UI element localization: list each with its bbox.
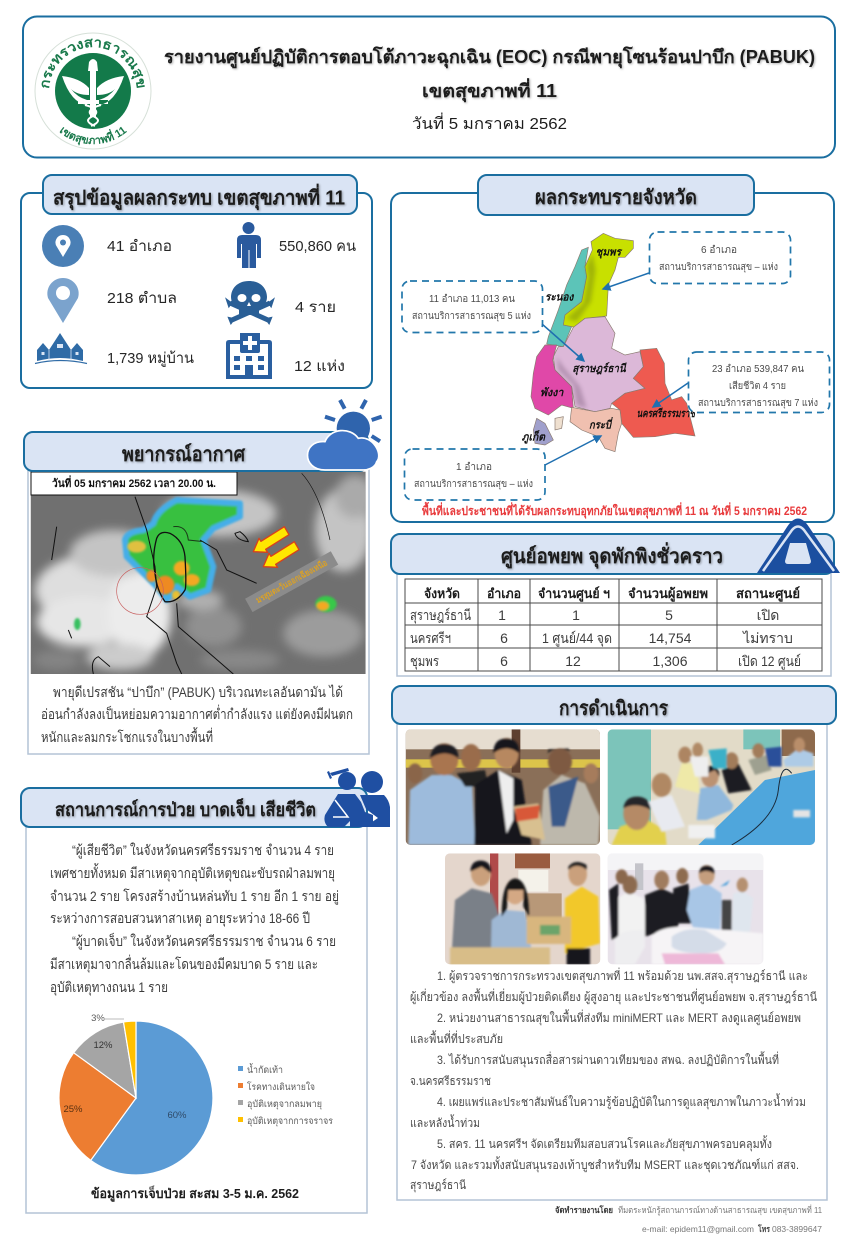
pie chart: 3% [91,1013,105,1024]
operations text: และพื้นที่ที่ประสบภัย [410,1030,503,1046]
shelter table: 1,306 [652,653,688,669]
shelter table: อำเภอ [487,586,521,601]
heading: by province: ผลกระทบรายจังหวัด [535,187,697,209]
shelter table: ไม่ทราบ [742,630,793,646]
map of provinces: นครศรีธรรมราช [637,407,696,420]
operations text [410,967,817,1193]
heading: shelters [391,534,834,574]
chart caption: ข้อมูลการเจ็บป่วย สะสม 3-5 ม.ค. 2562 [91,1184,299,1202]
operations text: สุราษฎร์ธานี [410,1178,466,1193]
satellite image [31,472,375,674]
map of provinces: ชุมพร [596,246,623,259]
panel: impact by province [391,175,834,522]
callout: Nakhon Si Thammarat: เสียชีวิต 4 ราย [729,380,786,392]
map caption: พื้นที่และประชาชนที่ได้รับผลกระทบอุทกภัยในเขตสุขภาพที่ 11 ณ วันที่ 5 มกราคม 2562 [422,501,807,519]
callout: Nakhon Si Thammarat: สถานบริการสาธารณสุข 7 แห่ง [698,398,818,409]
heading: situation [21,788,367,827]
footer credits: จัดทำรายงานโดย [555,1205,613,1215]
shelter table: 5 [665,607,673,623]
stat: villages: 1,739 หมู่บ้าน [107,350,194,367]
text: deaths and injuries: จำนวน 2 ราย โครงสร้างบ้านหล่นทับ 1 ราย อีก 1 ราย อยู่ [50,888,339,905]
heading: situation: สถานการณ์การป่วย บาดเจ็บ เสียชีวิต [55,797,316,821]
text: deaths and injuries: เพศชายทั้งหมด มีสาเหตุจากอุบัติเหตุขณะขับรถฝ่าลมพายุ [50,863,335,882]
icon: injured person with helper [324,768,390,827]
shelter table: ชุมพร [410,653,439,670]
shelter table: 6 [500,653,508,669]
heading: shelters: ศูนย์อพยพ จุดพักพิงชั่วคราว [501,541,723,570]
panel: regional impact summary [21,175,372,388]
operations text: ผู้เกี่ยวข้อง ลงพื้นที่เยี่ยมผู้ป่วยติดเตียง ผู้สูงอายุ และประชาชนที่ศูนย์อพยพ จ.สุราษฎร์ธานี [410,988,817,1005]
icon: houses [35,333,87,364]
shelter table: 1 [572,607,580,623]
shelter table: จำนวนผู้อพยพ [628,586,708,602]
shelter table: 6 [500,630,508,646]
footer credits [555,1204,822,1234]
shelter table: 14,754 [649,630,692,646]
heading: forecast: พยากรณ์อากาศ [122,443,246,466]
callout: Ranong: 11 อำเภอ 11,013 คน [429,294,515,305]
map of provinces: กระบี่ [589,416,614,431]
label: northeast monsoon: มรสุมตะวันออกเฉียงเหนือ [254,557,329,606]
text: deaths and injuries: มีสาเหตุมาจากลื่นล้มและโดนของมีคมบาด 5 ราย และ [50,955,318,973]
shelter table: 1 [498,607,506,623]
chart legend: อุบัติเหตุจากลมพายุ [247,1099,322,1110]
header panel [22,16,836,158]
operations text: 1. ผู้ตรวจราชการกระทรวงเขตสุขภาพที่ 11 พร้อมด้วย นพ.สสจ.สุราษฎร์ธานี และ [437,967,808,984]
operations text: 3. ได้รับการสนับสนุนรถสื่อสารผ่านดาวเทียมของ สพฉ. ลงปฏิบัติการในพื้นที่ [437,1051,779,1068]
logo: health region 11 seal: เขตสุขภาพที่ 11 [60,126,127,146]
arrow: to Chumphon [603,273,649,289]
callout: Chumphon: 6 อำเภอ [701,245,737,256]
stat: districts: 41 อำเภอ [107,238,172,255]
date box: วันที่ 05 มกราคม 2562 เวลา 20.00 น. [52,475,216,490]
footer credits: ทีมตระหนักรู้สถานการณ์ทางด้านสาธารณสุข เขตสุขภาพที่ 11 [618,1204,822,1216]
icon: location pin [47,278,79,323]
heading: operations [392,686,836,724]
heading: forecast [24,432,368,471]
pie chart [59,1013,213,1175]
map of provinces [522,233,696,452]
icon: person [237,222,261,268]
logo: health region 11 seal [34,32,152,150]
chart legend: อุบัติเหตุจากการจราจร [247,1116,333,1127]
icon: sun behind cloud [307,400,382,470]
photo: relief handover [406,729,600,845]
shelter table: นครศรีฯ [410,630,451,646]
shelter table: สุราษฎร์ธานี [410,607,471,624]
stat: people affected: 550,860 คน [279,238,356,255]
icon: hospital [226,333,272,379]
forecast text: พายุดีเปรสชัน “ปาบึก” (PABUK) บริเวณทะเลอันดามัน ได้ [53,684,343,701]
radar echoes [125,500,240,600]
footer credits: e-mail: epidem11@gmail.com [642,1224,754,1234]
shelter table [405,579,822,671]
panel: illness, injury and deaths [21,768,390,1213]
chart legend: น้ำกัดเท้า [247,1063,283,1076]
forecast text: หนักและลมกระโชกแรงในบางพื้นที่ [41,727,213,745]
heading: summary: สรุปข้อมูลผลกระทบ เขตสุขภาพที่ 11 [53,182,345,212]
map of provinces: สุราษฎร์ธานี [572,362,627,376]
panel: weather forecast [24,400,382,754]
arrow: to Nakhon Si Thammarat [653,383,688,407]
title: เขตสุขภาพที่ 11 [422,78,557,103]
photos [406,729,815,966]
map of provinces: ภูเก็ต [522,430,546,445]
callout: Chumphon: สถานบริการสาธารณสุข – แห่ง [659,262,778,273]
panel: shelters [391,518,840,676]
text: deaths and injuries: อุบัติเหตุทางถนน 1 ราย [50,979,168,996]
callout: Ranong [402,281,542,332]
shelter table: 1 ศูนย์/44 จุด [542,630,612,647]
shelter table: สถานะศูนย์ [736,586,800,602]
footer credits: 083-3899647 [772,1224,822,1234]
pie chart: 60% [167,1110,187,1121]
operations text: 2. หน่วยงานสาธารณสุขในพื้นที่ส่งทีม miniMERT และ MERT ลงดูแลศูนย์อพยพ [437,1009,801,1026]
chart legend [238,1063,333,1127]
shelter table: เปิด [757,607,779,623]
operations text: และหลังน้ำท่วม [410,1114,480,1130]
shelter table: 12 [565,653,581,669]
callout: Ranong: สถานบริการสาธารณสุข 5 แห่ง [412,311,531,322]
operations text: 5. สคร. 11 นครศรีฯ จัดเตรียมทีมสอบสวนโรคและภัยสุขภาพครอบคลุมทั้ง [437,1135,772,1152]
title: วันที่ 5 มกราคม 2562 [412,112,567,133]
text: deaths and injuries [50,842,339,996]
heading: by province [478,175,754,215]
callout: Krabi: สถานบริการสาธารณสุข – แห่ง [414,479,533,490]
stat: sub-districts: 218 ตำบล [107,290,177,307]
date box [31,472,237,495]
operations text: จ.นครศรีธรรมราช [410,1074,491,1088]
stat: deaths: 4 ราย [295,299,336,316]
chart legend: โรคทางเดินหายใจ [247,1081,315,1093]
title: รายงานศูนย์ปฏิบัติการตอบโต้ภาวะฉุกเฉิน (EOC) กรณีพายุโซนร้อนปาบึก (PABUK) [164,46,815,69]
photo: supply delivery [445,853,600,966]
pie chart: 12% [93,1040,113,1051]
arrows: monsoon wind direction [253,527,299,567]
photo: meeting room [608,729,815,845]
icon: tent [757,518,840,573]
callout: Nakhon Si Thammarat [688,352,830,412]
arrow: to Krabi [545,436,601,465]
text: deaths and injuries: ระหว่างการสอบสวนหาสาเหตุ อายุระหว่าง 18-66 ปี [50,910,310,927]
heading: operations: การดำเนินการ [559,698,668,720]
footer credits: โทร [757,1224,770,1234]
callout: Nakhon Si Thammarat: 23 อำเภอ 539,847 คน [712,364,804,375]
operations text: 7 จังหวัด และรวมทั้งสนับสนุนรองเท้าบูชสำหรับทีม MSERT และชุดเวชภัณฑ์แก่ สสจ. [411,1156,799,1173]
map of provinces: พังงา [540,386,564,399]
callout: Chumphon [650,232,790,284]
heading: summary [43,175,357,214]
arrow: to Surat Thani area [542,324,584,361]
shelter table: เปิด 12 ศูนย์ [738,653,801,670]
logo: health region 11 seal: กระทรวงสาธารณสุข [42,38,145,88]
text: deaths and injuries: “ผู้เสียชีวิต” ในจังหวัดนครศรีธรรมราช จำนวน 4 ราย [72,842,334,859]
pie chart: 25% [63,1104,83,1115]
forecast text [41,684,353,745]
text: deaths and injuries: “ผู้บาดเจ็บ” ในจังหวัดนครศรีธรรมราช จำนวน 6 ราย [72,932,336,950]
icon: map pin in circle [42,225,84,267]
map of provinces: ระนอง [545,292,575,304]
shelter table: จังหวัด [424,586,460,601]
icon: skull and crossbones [227,281,273,323]
panel: operations [392,686,836,1200]
callout: Krabi [404,449,545,500]
title [164,46,815,133]
photo: hospital visit [608,853,763,964]
stat: health facilities: 12 แห่ง [294,358,345,375]
callout: Krabi: 1 อำเภอ [456,462,492,473]
shelter table: จำนวนศูนย์ ฯ [538,586,610,602]
forecast text: อ่อนกำลังลงเป็นหย่อมความอากาศต่ำกำลังแรง แต่ยังคงมีฝนตก [41,705,353,722]
operations text: 4. เผยแพร่และประชาสัมพันธ์ใบความรู้ข้อปฏิบัติในการดูแลสุขภาพในภาวะน้ำท่วม [437,1093,806,1110]
